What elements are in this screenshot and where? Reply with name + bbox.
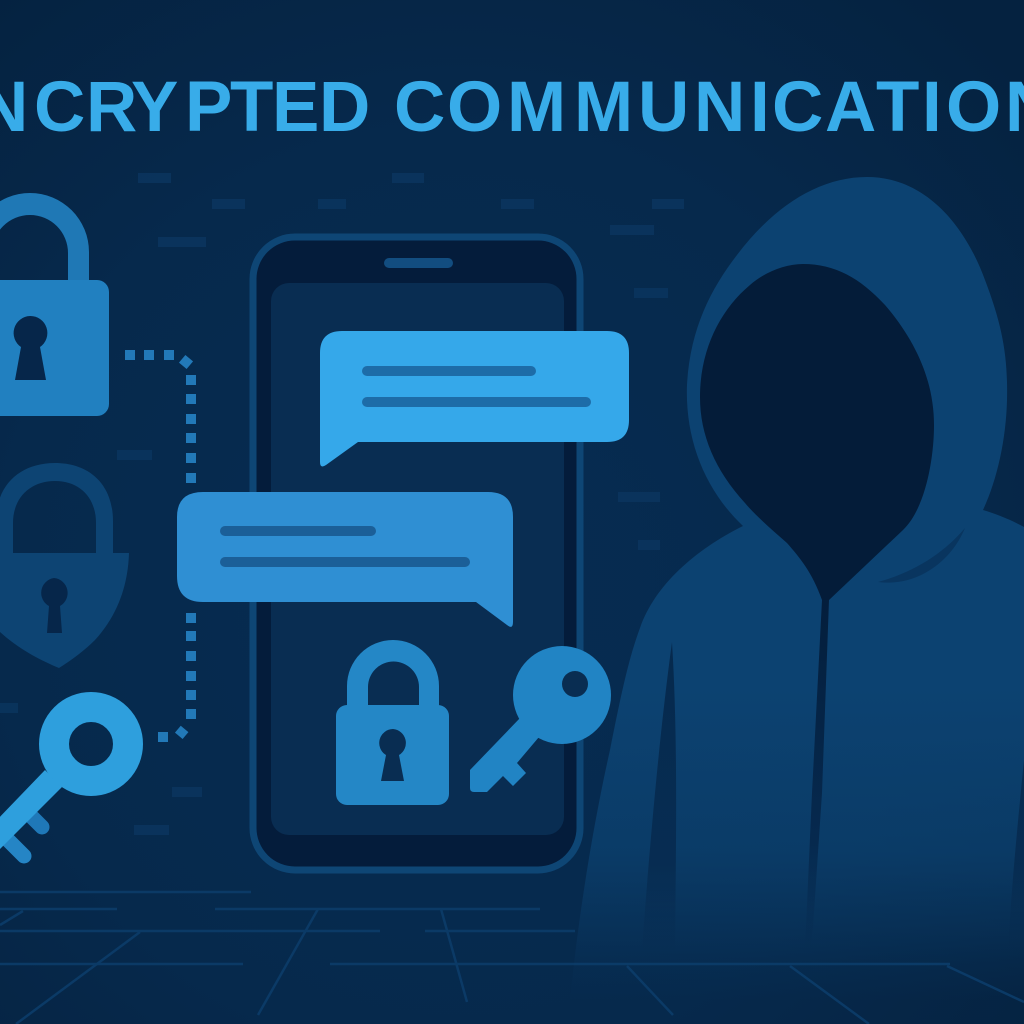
phone [253, 237, 580, 870]
phone screen [271, 283, 564, 835]
hoodie body [570, 177, 1024, 1000]
lower message bubble [177, 492, 513, 627]
background data dashes [0, 173, 684, 835]
hood opening face shadow [700, 264, 934, 600]
right sleeve crease [1008, 760, 1024, 950]
keyhole [41, 578, 68, 633]
phone lock [336, 640, 449, 805]
upper message bubble [320, 331, 629, 466]
shield lock left [0, 463, 129, 668]
dotted connector [125, 350, 196, 742]
key left [0, 707, 128, 859]
phone speaker [384, 258, 453, 268]
keyhole [379, 729, 406, 781]
floor grid [0, 892, 1024, 1024]
hooded figure [570, 177, 1024, 1000]
hoodie zipper [804, 600, 829, 950]
large lock left [0, 193, 109, 416]
phone frame [253, 237, 580, 870]
left sleeve crease [642, 642, 676, 950]
key teeth [28, 813, 42, 827]
hood fold [878, 528, 965, 583]
phone key [470, 646, 611, 792]
keyhole [14, 316, 47, 380]
